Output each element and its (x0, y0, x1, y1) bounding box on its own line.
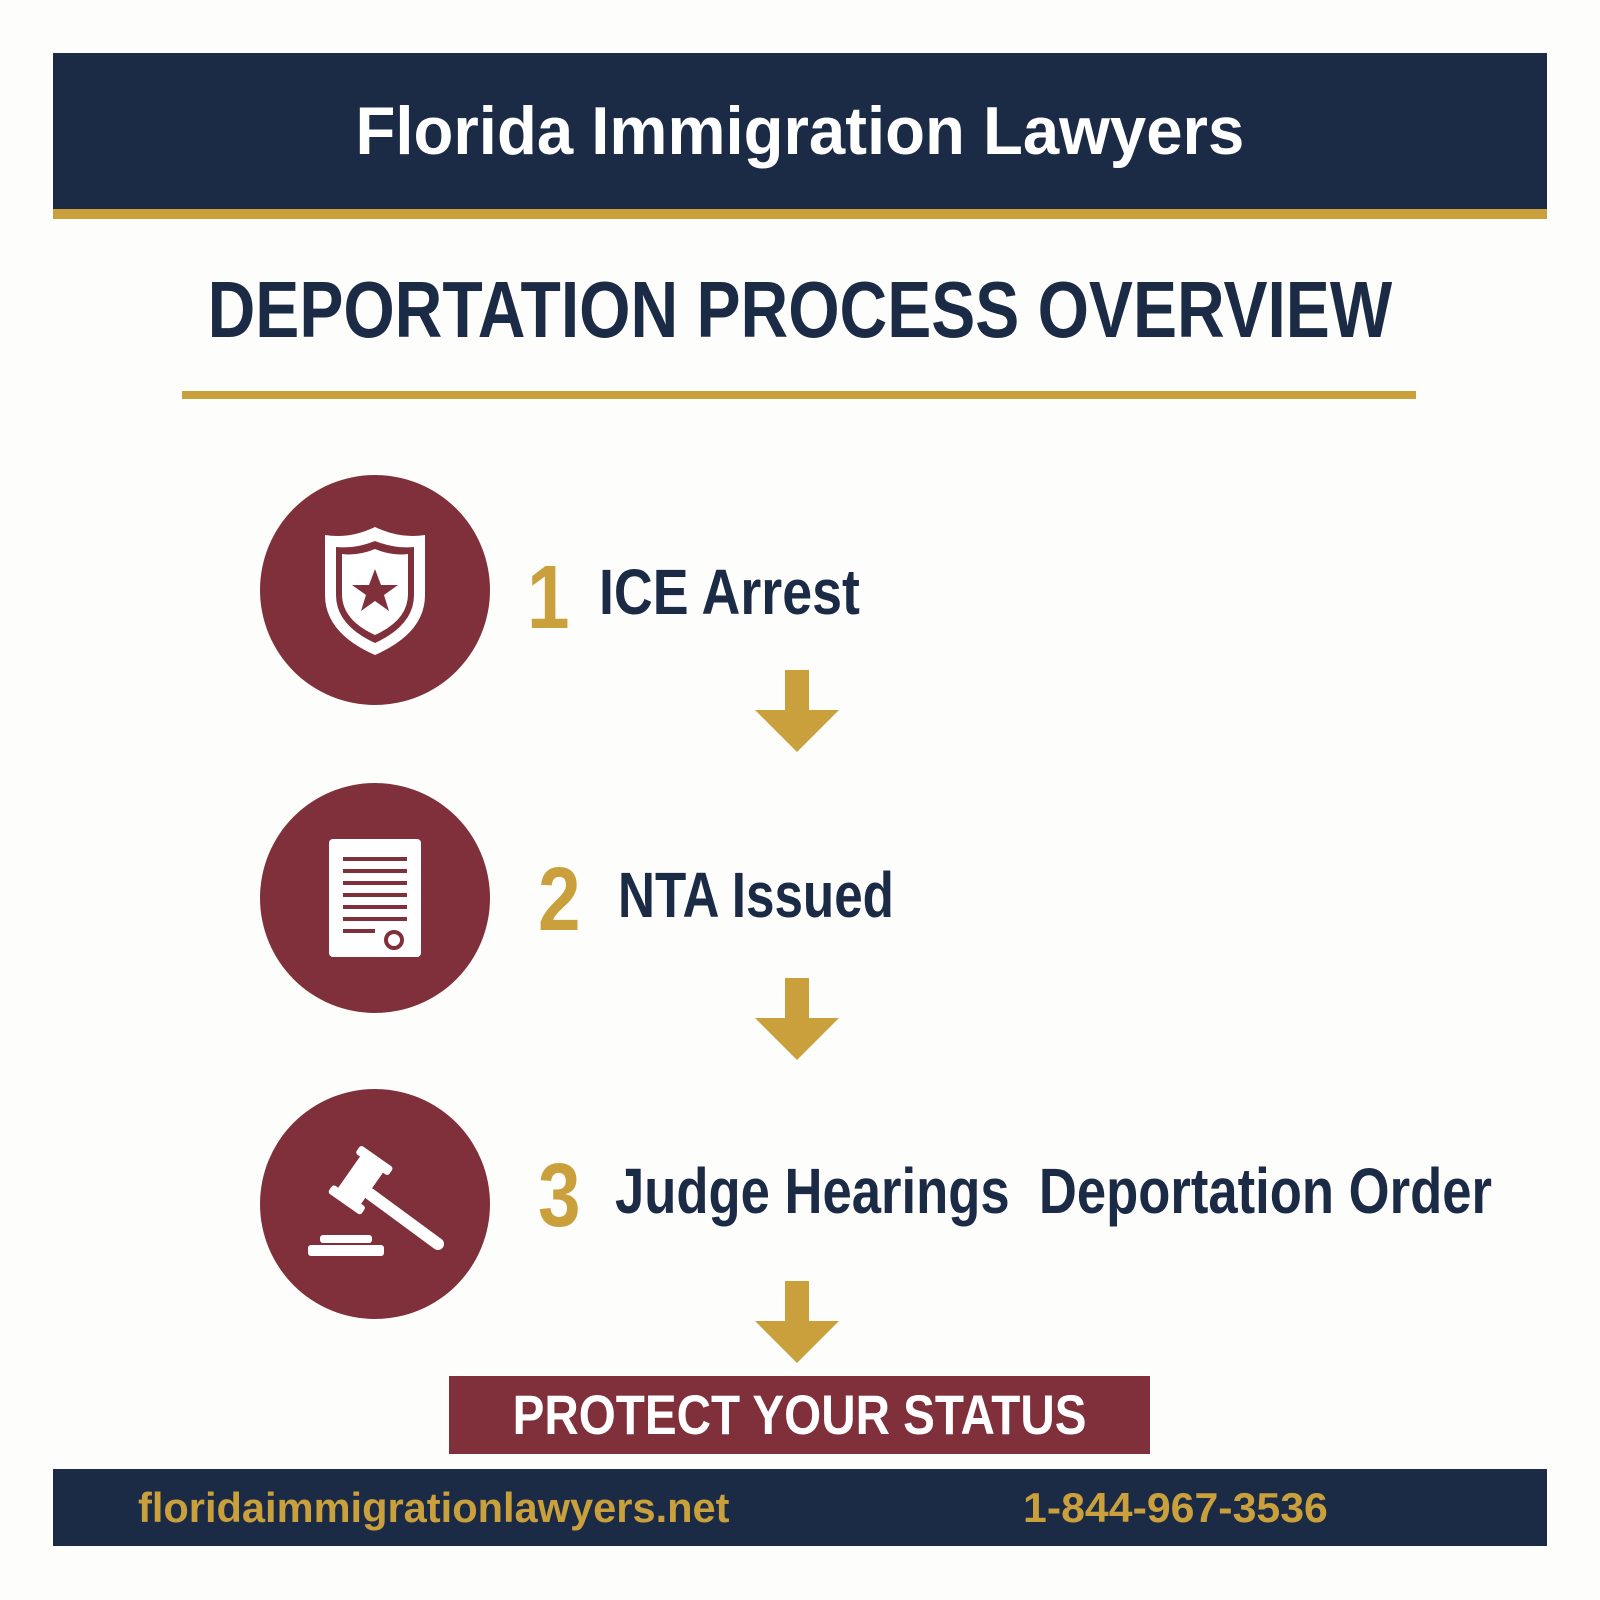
main title: DEPORTATION PROCESS OVERVIEW (208, 265, 1392, 354)
step 1 (260, 475, 860, 705)
footer phone: 1-844-967-3536 (1023, 1484, 1328, 1531)
header title: Florida Immigration Lawyers (356, 93, 1244, 169)
footer bar (53, 1469, 1547, 1546)
title underline (182, 391, 1416, 399)
step 2 (260, 783, 894, 1013)
arrow 1 (755, 670, 839, 752)
icon: document (260, 783, 490, 1013)
icon: gavel (260, 1089, 490, 1319)
label: NTA Issued: NTA Issued (618, 859, 894, 931)
call to action box: PROTECT YOUR STATUS (513, 1383, 1086, 1446)
arrow 2 (755, 978, 839, 1060)
arrow 3 (755, 1281, 839, 1363)
call to action box (449, 1376, 1150, 1454)
number 3: 3 (538, 1146, 581, 1246)
icon: shield (260, 475, 490, 705)
header banner (53, 53, 1547, 219)
number 1: 1 (527, 548, 570, 648)
step 3 (260, 1089, 1492, 1319)
footer website: floridaimmigrationlawyers.net (138, 1484, 730, 1531)
label: ICE Arrest: ICE Arrest (599, 556, 860, 628)
number 2: 2 (538, 850, 581, 950)
label: Judge Hearings Deportation Order: Judge Hearings Deportation Order (615, 1155, 1492, 1227)
